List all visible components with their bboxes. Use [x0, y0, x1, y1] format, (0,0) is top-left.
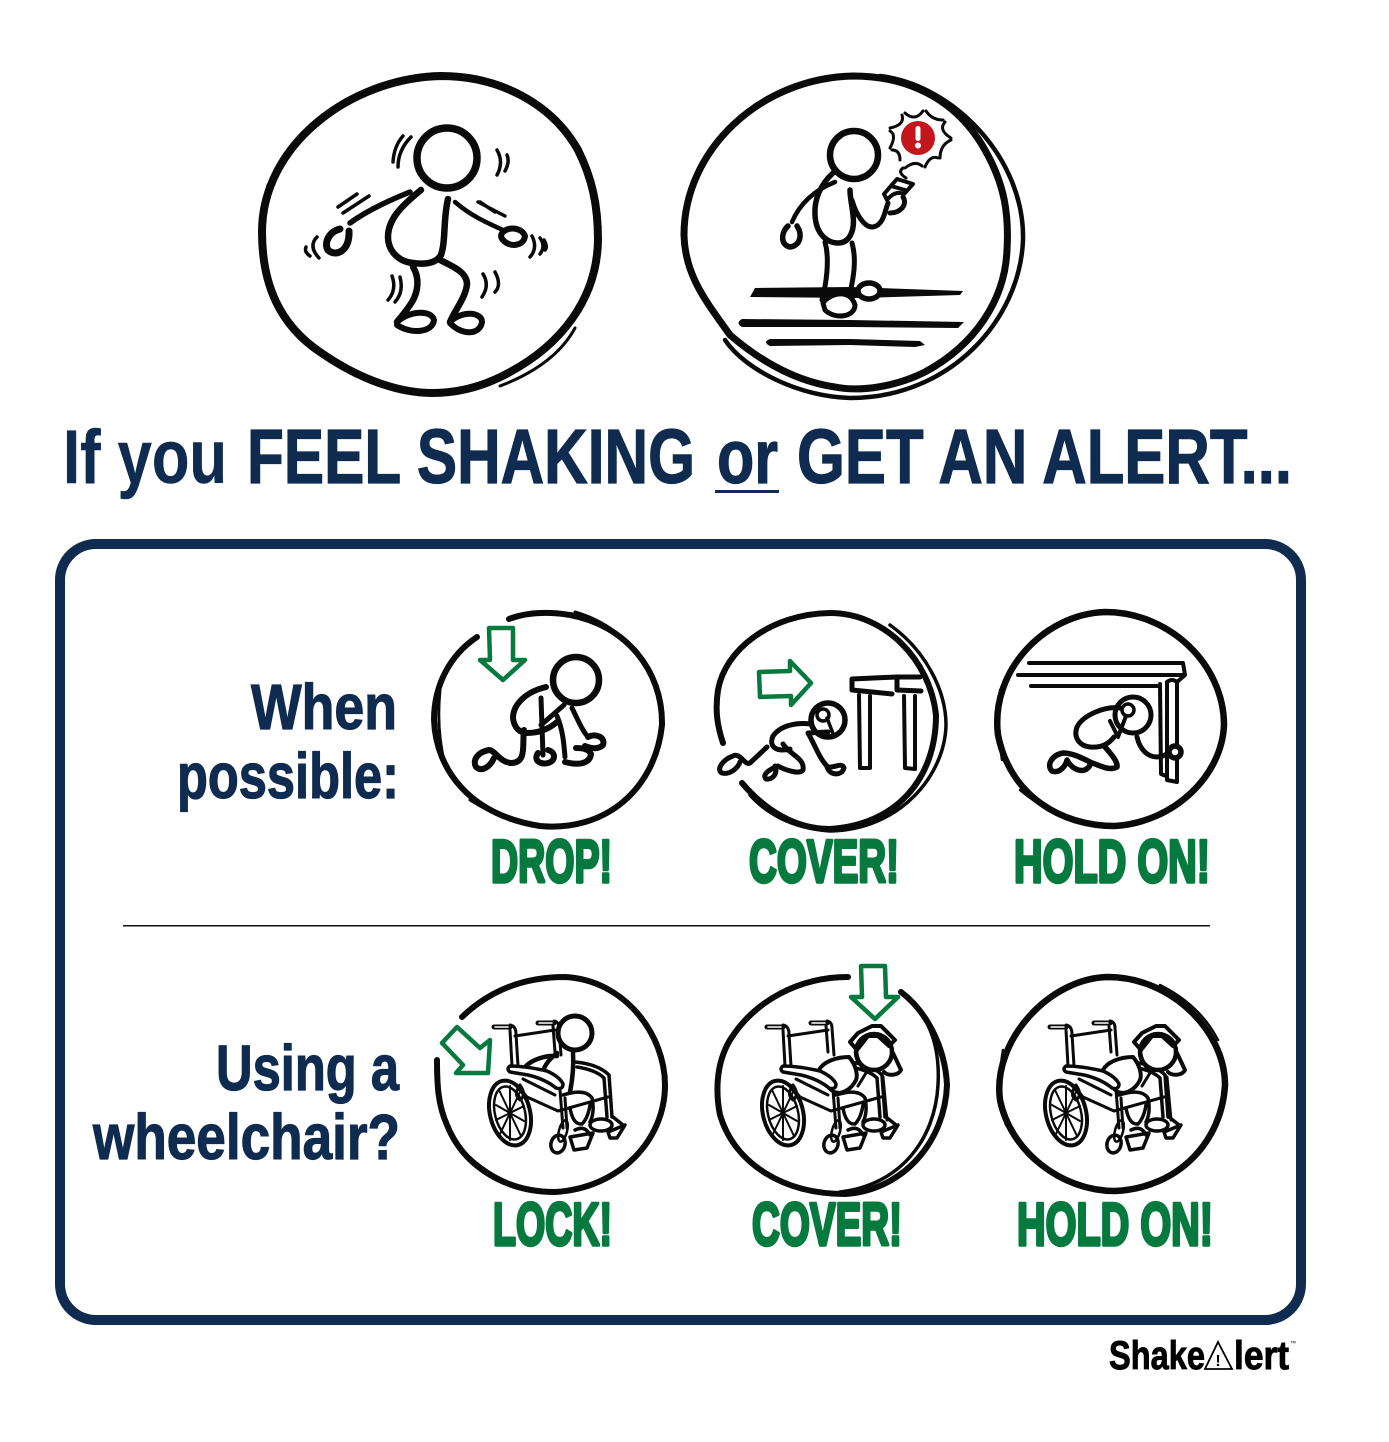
title: If you — [63, 415, 227, 500]
icon: cover — [717, 613, 946, 831]
heading: using a wheelchair: wheelchair? — [92, 1101, 400, 1173]
label: drop: DROP! — [491, 828, 612, 895]
icon: get an alert — [684, 76, 1023, 398]
icon: hold on — [997, 612, 1224, 826]
icon: green arrow down — [480, 628, 525, 680]
title: FEEL SHAKING — [247, 414, 695, 500]
panel: instructions — [60, 544, 1301, 1320]
icon: green arrow right — [759, 661, 811, 705]
icon: cover in wheelchair — [717, 966, 947, 1194]
label: hold on: HOLD ON! — [1014, 828, 1210, 895]
label: lock: LOCK! — [493, 1191, 612, 1258]
icon: feel shaking — [262, 76, 598, 393]
heading: when possible: When — [251, 671, 397, 743]
logo: ShakeAlert — [1109, 1334, 1296, 1378]
label: hold on wheelchair: HOLD ON! — [1017, 1191, 1213, 1258]
label: cover wheelchair: COVER! — [752, 1191, 902, 1258]
label: cover: COVER! — [749, 828, 899, 895]
heading: using a wheelchair: Using a — [216, 1032, 399, 1104]
icon: hold on in wheelchair — [999, 977, 1225, 1191]
logo: ShakeAlert: ™ — [1290, 1340, 1296, 1347]
heading: when possible — [177, 671, 399, 812]
logo: ShakeAlert: ! — [1215, 1353, 1221, 1370]
divider — [123, 925, 1210, 926]
icon: lock — [437, 977, 665, 1192]
icon: green arrow diagonal — [442, 1027, 490, 1073]
icon: green arrow down — [851, 966, 898, 1019]
icon: table top — [1018, 663, 1185, 682]
heading: using a wheelchair — [92, 1032, 400, 1173]
icon: red alert — [890, 111, 951, 178]
logo: ShakeAlert: Shake — [1109, 1334, 1205, 1378]
icon: table — [852, 677, 921, 694]
title — [63, 414, 1292, 500]
logo: ShakeAlert: lert — [1234, 1334, 1289, 1378]
icon: drop — [434, 612, 662, 827]
heading: when possible: possible: — [177, 740, 399, 812]
title: or — [717, 415, 778, 500]
